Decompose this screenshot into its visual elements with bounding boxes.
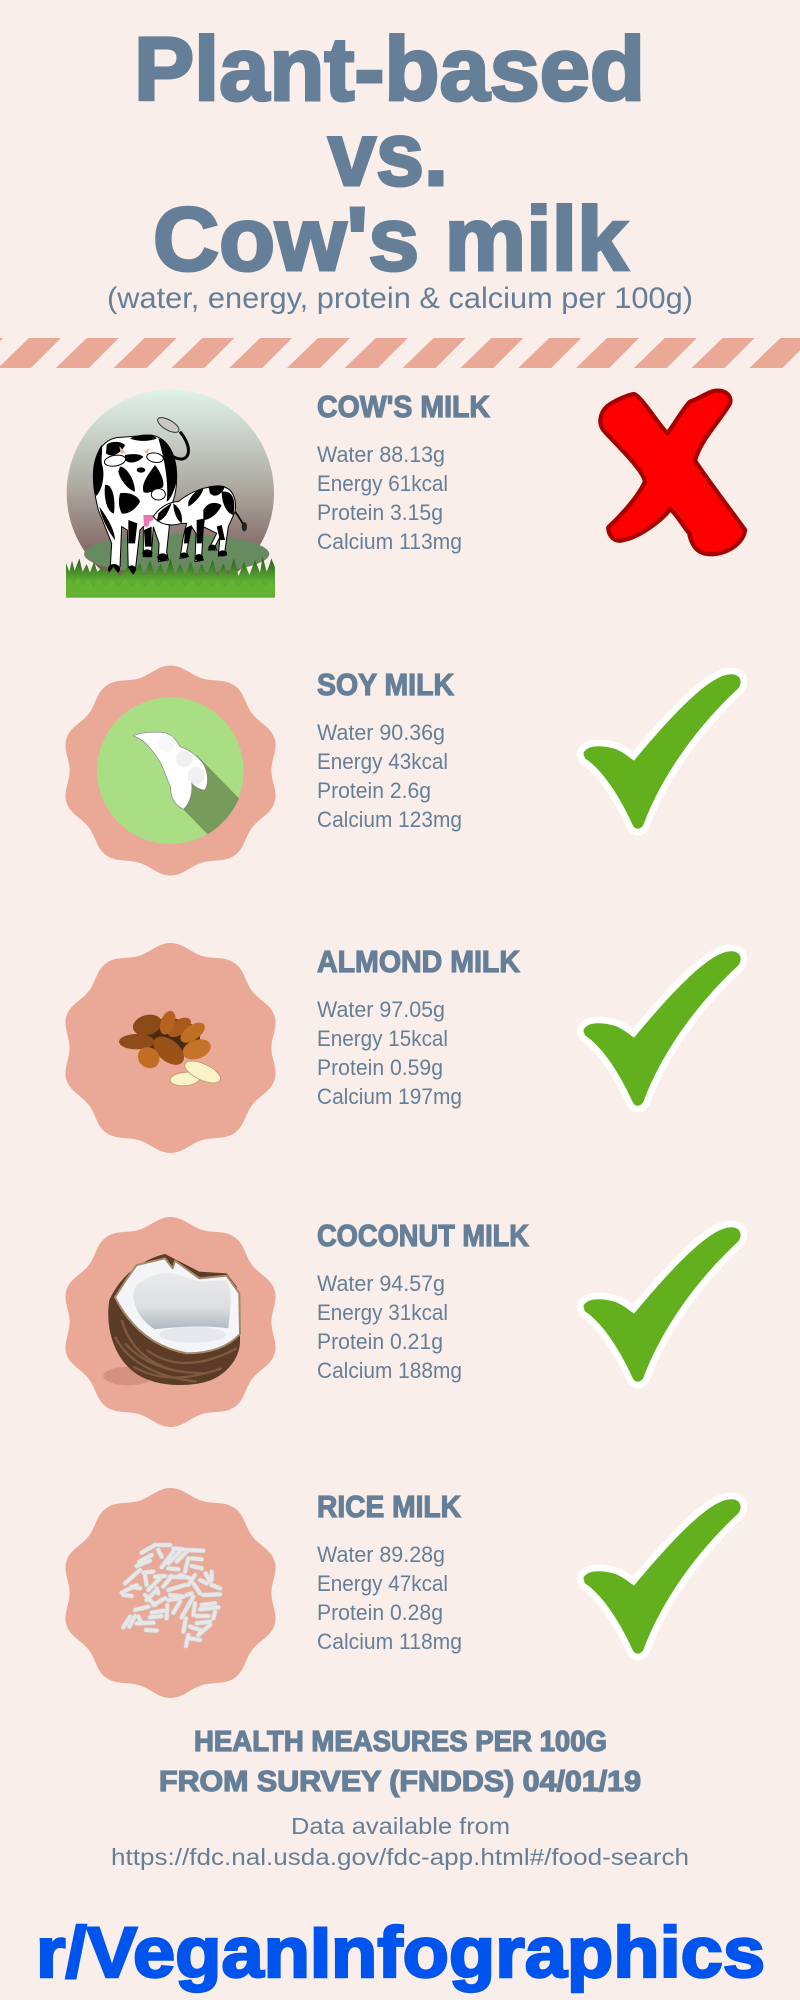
icon: green check — [583, 1499, 741, 1654]
panel: almond milk — [65, 943, 741, 1153]
text: soy milk: Calcium 123mg — [317, 807, 462, 832]
text: rice milk: Water 89.28g — [317, 1542, 445, 1567]
icon: green check — [583, 951, 741, 1106]
icon: almonds badge — [65, 943, 276, 1153]
icon: rice badge — [65, 1488, 276, 1698]
footer heading — [159, 1726, 641, 1798]
icon: cows on grass — [66, 389, 275, 598]
heading: cow's milk: COW'S MILK — [317, 390, 490, 424]
text: almond milk: Water 97.05g — [317, 997, 445, 1022]
text: soy milk: Protein 2.6g — [317, 778, 431, 803]
panel: soy milk — [65, 666, 741, 876]
icon: soy pod badge — [65, 666, 276, 876]
data source note — [111, 1813, 689, 1870]
text: coconut milk — [317, 1219, 529, 1383]
text: almond milk — [317, 945, 520, 1109]
community name: r/VeganInfographics — [36, 1914, 765, 1993]
text: rice milk: RICE MILK — [317, 1490, 461, 1524]
text: rice milk: Protein 0.28g — [317, 1600, 443, 1625]
title: vs. — [328, 105, 448, 205]
text: coconut milk: Water 94.57g — [317, 1271, 445, 1296]
panel: cow's milk — [66, 389, 745, 598]
text: soy milk: SOY MILK — [317, 668, 454, 702]
text: soy milk — [317, 668, 462, 832]
data source note: Data available from — [291, 1813, 510, 1839]
text: almond milk: Calcium 197mg — [317, 1084, 462, 1109]
text: coconut milk: Calcium 188mg — [317, 1358, 462, 1383]
icon: red cross — [600, 391, 745, 554]
text: coconut milk: Protein 0.21g — [317, 1329, 443, 1354]
nutrition values: cow's milk: Protein 3.15g — [317, 500, 443, 525]
text: rice milk — [317, 1490, 462, 1654]
text: soy milk: Water 90.36g — [317, 720, 445, 745]
text: almond milk: Energy 15kcal — [317, 1026, 448, 1051]
text: coconut milk: COCONUT MILK — [317, 1219, 529, 1253]
footer heading: HEALTH MEASURES PER 100G — [194, 1726, 607, 1758]
nutrition values: cow's milk — [317, 442, 462, 554]
panel: coconut milk — [65, 1217, 741, 1427]
icon: green check — [583, 1227, 741, 1382]
text: soy milk: Energy 43kcal — [317, 749, 448, 774]
text: rice milk: Calcium 118mg — [317, 1629, 462, 1654]
text: almond milk: ALMOND MILK — [317, 945, 520, 979]
footer heading: FROM SURVEY (FNDDS) 04/01/19 — [159, 1766, 641, 1798]
nutrition values: cow's milk: Water 88.13g — [317, 442, 445, 467]
title: Cow's milk — [153, 190, 629, 290]
text: rice milk: Energy 47kcal — [317, 1571, 448, 1596]
text: coconut milk: Energy 31kcal — [317, 1300, 448, 1325]
title — [134, 20, 645, 290]
icon: coconut badge — [65, 1217, 276, 1427]
icon: green check — [583, 674, 741, 829]
data source note: https://fdc.nal.usda.gov/fdc-app.html#/food-search — [111, 1844, 689, 1870]
title: Plant-based — [134, 20, 645, 120]
subtitle: (water, energy, protein & calcium per 100g) — [107, 282, 693, 315]
nutrition values: cow's milk: Energy 61kcal — [317, 471, 448, 496]
text: almond milk: Protein 0.59g — [317, 1055, 443, 1080]
panel: rice milk — [65, 1488, 741, 1698]
nutrition values: cow's milk: Calcium 113mg — [317, 529, 462, 554]
